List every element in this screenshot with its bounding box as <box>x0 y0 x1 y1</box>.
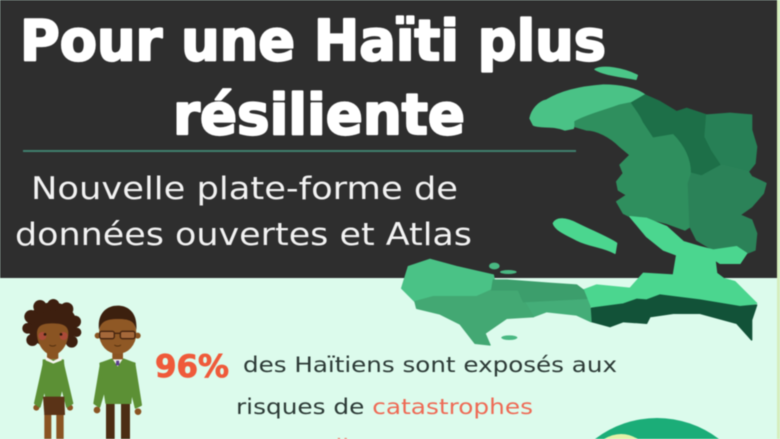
right edge strip <box>777 0 780 439</box>
subtitle: données ouvertes et Atlas <box>15 217 472 253</box>
region: Ouest <box>583 217 757 307</box>
subtitle <box>15 171 472 253</box>
subtitle: Nouvelle plate-forme de <box>31 171 458 207</box>
illustration: two people <box>22 299 141 439</box>
region: Nippes north <box>492 280 587 302</box>
statistic text line 1: des Haïtiens sont exposés aux <box>243 353 617 377</box>
region: Nord-Ouest <box>530 85 645 130</box>
panel: light lower background <box>0 278 777 439</box>
statistic: 96%: 96% <box>155 349 229 385</box>
islets <box>489 263 517 340</box>
map of Haiti <box>402 67 766 345</box>
region: Sud-Est <box>591 295 757 340</box>
icon: green circle <box>595 418 719 439</box>
person: woman <box>22 299 81 439</box>
title <box>20 9 606 148</box>
title: résiliente <box>173 83 465 148</box>
panel: dark header background <box>0 0 777 278</box>
statistic text line 2: risques de catastrophes <box>236 395 533 419</box>
region: Nord <box>632 95 722 176</box>
region: Artibonite <box>575 103 692 230</box>
title: Pour une Haïti plus <box>20 9 606 74</box>
person: man <box>94 306 141 439</box>
region: Nord-Est <box>705 113 757 172</box>
region: Grand'Anse <box>402 259 495 302</box>
region: Centre <box>688 165 766 253</box>
divider under title <box>23 150 576 152</box>
island: La Gonâve <box>553 219 617 253</box>
region: Sud <box>415 290 533 345</box>
island: La Tortue <box>595 67 637 79</box>
region: Nippes south <box>523 298 591 322</box>
